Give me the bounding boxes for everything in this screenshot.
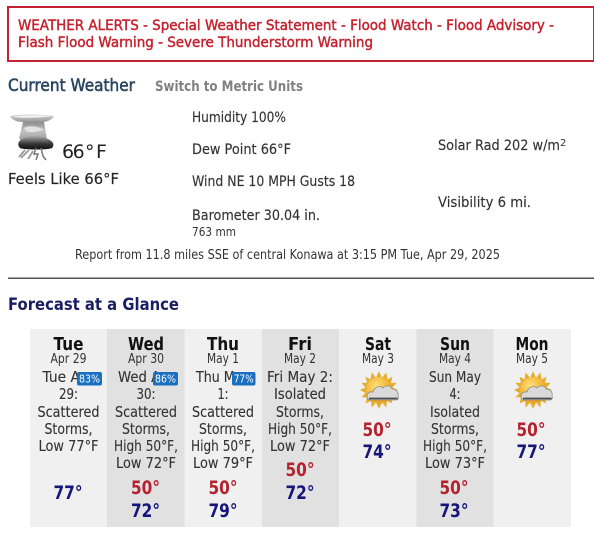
forecast: Tuesday: 83% [79,374,100,386]
forecast: Thursday: Scattered [192,403,254,421]
report source line: Report from 11.8 miles SSE of central Konawa at 3:15 PM Tue, Apr 29, 2025 [75,248,500,263]
alert banner: Flash Flood Warning - Severe Thunderstorm Warning [18,35,373,51]
readings: barometer: Barometer 30.04 in. [192,208,320,224]
forecast: Thursday [191,335,256,522]
alert banner [8,7,594,61]
current temperature: F [96,141,107,163]
readings: dew point: Dew Point 66°F [192,142,291,158]
forecast: Wednesday: 30: [136,385,156,403]
readings: wind: Wind NE 10 MPH Gusts 18 [192,174,355,190]
forecast: Sunday: 4: [450,385,460,403]
forecast: Friday: 50° [286,459,314,481]
forecast: Sunday: Low 73°F [425,454,485,472]
forecast: Sunday: Sun May [429,368,481,386]
forecast: Monday: 77° [516,441,546,463]
current temperature: ° [85,141,94,163]
forecast: Wednesday: 86% [155,374,176,386]
forecast: Friday [267,335,333,504]
forecast: Wednesday: Storms, [122,420,170,438]
forecast: Saturday [360,335,398,463]
readings: barometer mm: 763 mm [192,225,236,239]
forecast: Tuesday: Apr 29 [50,352,86,367]
current temperature: 66 [62,141,84,163]
forecast: Thursday: May 1 [207,352,239,367]
forecast: Friday: May 2 [284,352,316,367]
forecast: Friday: Isolated [274,385,326,403]
forecast: Tuesday: 77° [54,482,82,504]
feels like: Feels Like 66°F [8,170,119,188]
forecast: Sunday: Isolated [430,403,480,421]
forecast: Thursday: Thu May [195,368,250,386]
forecast: Thursday: High 50°F, [191,437,255,455]
forecast: Tuesday: Scattered [38,403,100,421]
forecast: Thursday: 77% [234,374,254,386]
forecast: Sunday: Sun [440,335,470,355]
forecast: Wednesday: Scattered [115,403,177,421]
forecast: Wednesday [114,335,178,522]
forecast: Thursday: Thu [207,335,239,355]
forecast: Tuesday: Tue Apr [42,368,95,386]
forecast: Tuesday: Storms, [44,420,92,438]
forecast: Monday: May 5 [516,352,548,367]
forecast: Thursday: 50° [208,477,238,499]
icon: thunderstorm [10,114,54,160]
alert banner: WEATHER ALERTS - Special Weather Statement - Flood Watch - Flood Advisory - [18,18,554,34]
forecast: Thursday: Low 79°F [193,454,253,472]
forecast: Wednesday: Low 72°F [116,454,176,472]
forecast: Tuesday: Low 77°F [38,437,98,455]
forecast: Wednesday: 72° [131,500,160,522]
forecast: Saturday: Sat [365,335,391,355]
forecast: Wednesday: Apr 30 [128,352,164,367]
forecast: Sunday: 50° [440,477,468,499]
forecast: Saturday: May 3 [362,352,394,367]
forecast panel [30,329,571,527]
forecast: Wednesday: Wed [128,335,164,355]
forecast: Saturday: 74° [362,441,392,463]
icon: partly sunny [514,371,552,409]
forecast: Tuesday: 29: [59,385,78,403]
forecast: Friday: 72° [286,482,314,504]
forecast: Friday: High 50°F, [268,420,332,438]
forecast: Friday: Fri [288,335,312,355]
readings: solar radiation: Solar Rad 202 w/m [438,138,560,154]
forecast: Wednesday: High 50°F, [114,437,178,455]
forecast: Saturday: 50° [362,419,392,441]
forecast: Wednesday: Wed Apr [118,368,175,386]
forecast: Wednesday: 50° [131,477,160,499]
forecast: Sunday [423,335,487,522]
forecast: Sunday: High 50°F, [423,437,487,455]
forecast: Tuesday: Tue [54,335,84,355]
icon: partly sunny [360,371,398,409]
forecast: Tuesday [38,335,102,504]
forecast: Thursday: 79° [208,500,238,522]
forecast: Monday [514,335,552,463]
forecast: Sunday: Storms, [431,420,479,438]
forecast: Thursday: Storms, [199,420,247,438]
forecast: Monday: Mon [516,335,548,355]
heading: current weather: Current Weather [8,76,135,96]
forecast: Sunday: May 4 [439,352,471,367]
heading: forecast at a glance: Forecast at a Glance [8,295,179,315]
forecast: Friday: Low 72°F [270,437,330,455]
forecast: Friday: Fri May 2: [267,368,333,386]
forecast: Thursday: 1: [218,385,228,403]
readings: visibility: Visibility 6 mi. [438,195,531,211]
link: switch to metric units: Switch to Metric Units [155,79,303,95]
readings: solar radiation: 2 [560,138,566,149]
readings: humidity: Humidity 100% [192,110,286,126]
forecast: Friday: Storms, [276,403,324,421]
forecast: Sunday: 73° [440,500,468,522]
forecast: Monday: 50° [516,419,546,441]
